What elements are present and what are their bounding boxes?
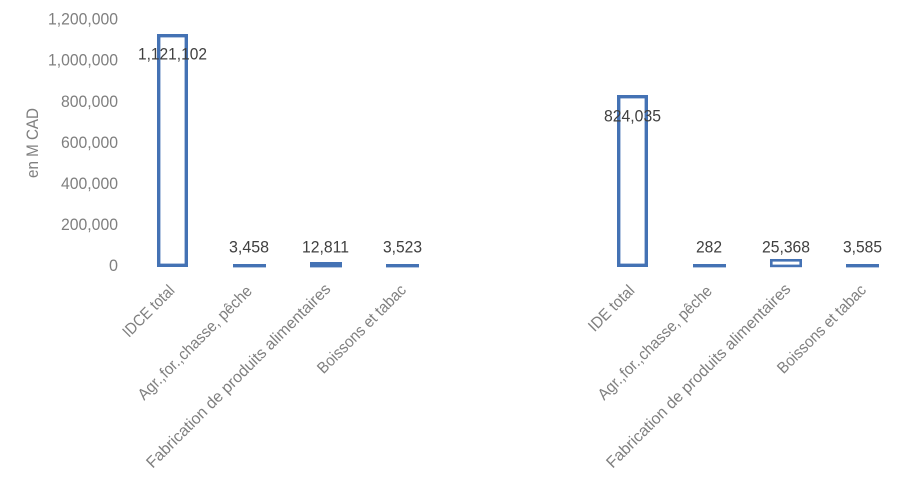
value labels bbox=[604, 108, 882, 256]
value labels: 3,458 bbox=[229, 238, 269, 256]
bar: Agr., for., chasse, peche bbox=[693, 264, 726, 267]
y axis tick labels: 1,000,000 bbox=[48, 52, 118, 70]
category labels: Boissons et tabac bbox=[774, 282, 870, 377]
y axis tick labels: 200,000 bbox=[61, 216, 118, 234]
category labels: IDE total bbox=[585, 282, 638, 335]
value labels: 1,121,102 bbox=[138, 46, 207, 64]
category labels: Boissons et tabac bbox=[314, 282, 410, 377]
bar: Boissons et tabac bbox=[386, 264, 419, 267]
bar: IDE total bbox=[619, 97, 646, 265]
bar: IDCE total bbox=[159, 36, 186, 265]
value labels: 25,368 bbox=[762, 238, 810, 256]
value labels: 282 bbox=[696, 238, 722, 256]
left chart: IDCE by sector bbox=[120, 36, 422, 472]
y axis tick labels bbox=[48, 10, 118, 275]
category labels: IDCE total bbox=[120, 282, 178, 341]
right chart: IDE by sector bbox=[585, 97, 882, 472]
bar: Fabrication de produits alimentaires bbox=[771, 260, 801, 266]
y axis tick labels: 800,000 bbox=[61, 93, 118, 111]
y axis title: en M CAD bbox=[24, 108, 42, 178]
y axis tick labels: 600,000 bbox=[61, 134, 118, 152]
category labels: Agr.,for.,chasse, pêche bbox=[595, 283, 716, 404]
category labels: Agr.,for.,chasse, pêche bbox=[135, 283, 256, 404]
category labels: Fabrication de produits alimentaires bbox=[603, 281, 794, 472]
value labels: 12,811 bbox=[302, 238, 349, 256]
category labels: Fabrication de produits alimentaires bbox=[143, 281, 334, 472]
value labels: 824,035 bbox=[604, 108, 661, 126]
bar: Agr., for., chasse, peche bbox=[233, 264, 266, 267]
category labels bbox=[120, 281, 410, 472]
y axis tick labels: 1,200,000 bbox=[48, 10, 118, 28]
y axis tick labels: 400,000 bbox=[61, 175, 118, 193]
bar: Fabrication de produits alimentaires bbox=[310, 262, 342, 267]
y axis tick labels: 0 bbox=[109, 257, 118, 275]
value labels: 3,523 bbox=[383, 238, 422, 256]
value labels: 3,585 bbox=[843, 238, 882, 256]
bar: Boissons et tabac bbox=[846, 264, 879, 267]
value labels bbox=[138, 46, 422, 256]
category labels bbox=[585, 281, 870, 472]
